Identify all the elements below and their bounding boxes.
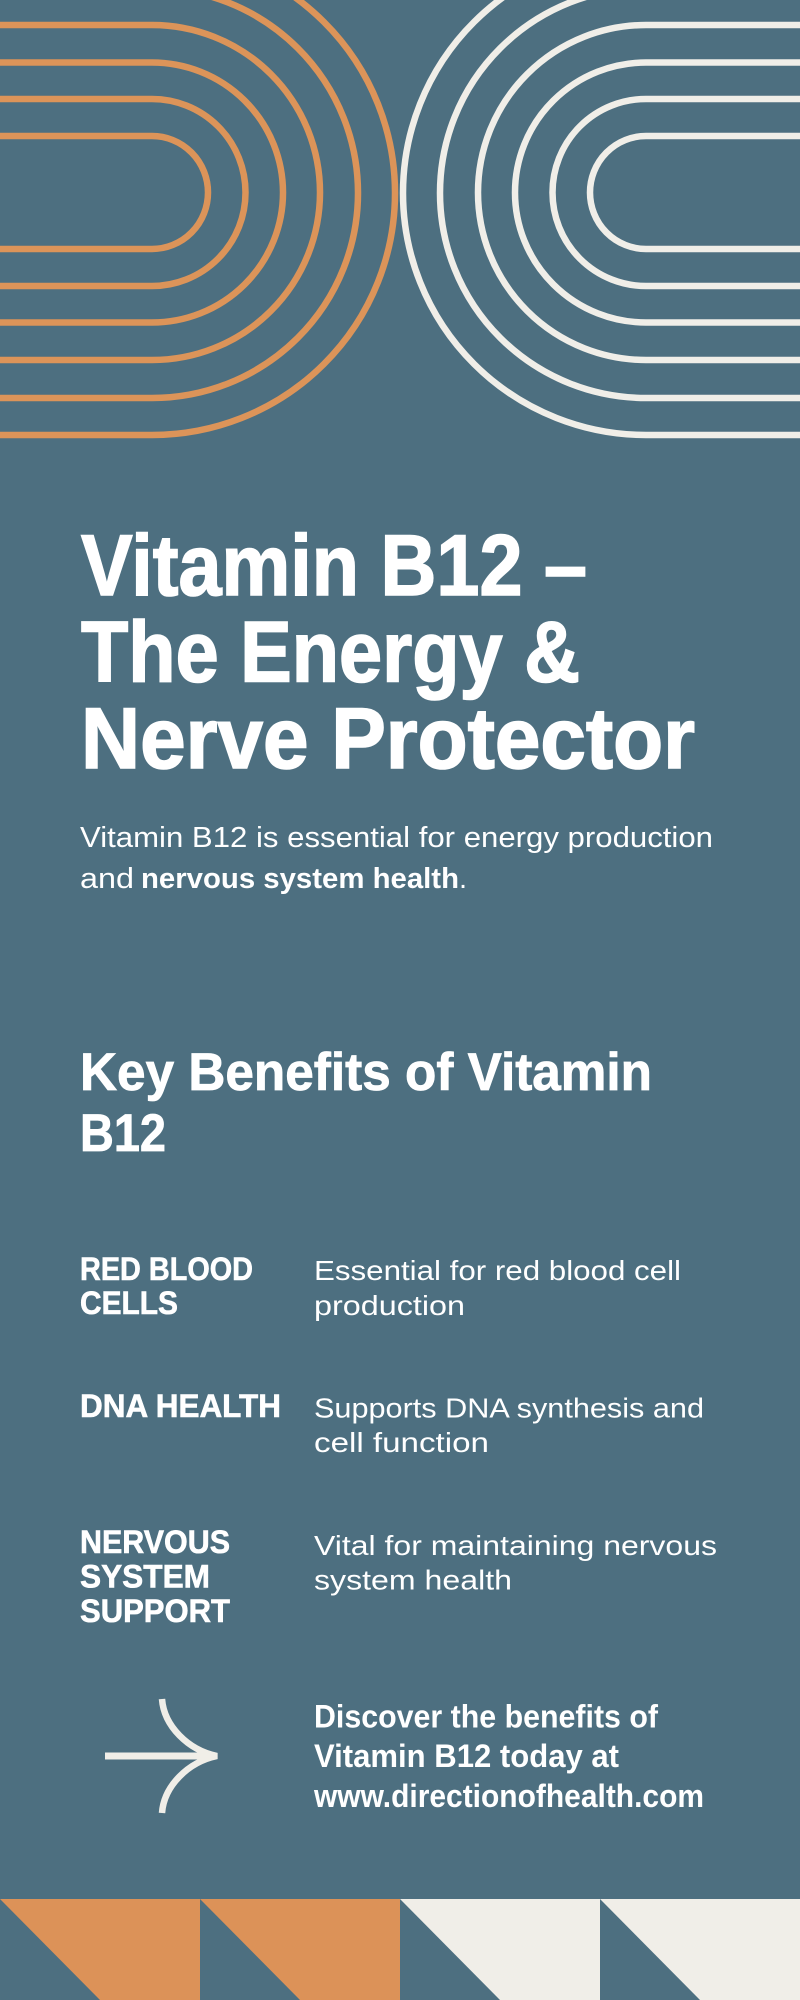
title: Nerve Protector — [81, 691, 695, 787]
description: DNA health: Supports DNA synthesis and — [314, 1392, 704, 1424]
label: red blood cells: RED BLOOD — [80, 1251, 253, 1287]
description: DNA health — [314, 1392, 704, 1458]
call to action: Discover the benefits of — [314, 1698, 658, 1734]
label: nervous system support: NERVOUS — [80, 1524, 230, 1560]
section heading: key benefits: Key Benefits of Vitamin — [80, 1043, 652, 1102]
label: nervous system support: SUPPORT — [80, 1593, 230, 1629]
decorative orange concentric arches — [0, 0, 395, 435]
title: Vitamin B12 – — [81, 518, 587, 614]
description: nervous system support — [314, 1530, 717, 1596]
label: red blood cells — [80, 1251, 253, 1321]
description: nervous system support: Vital for maintaining nervous — [314, 1530, 717, 1561]
description: red blood cells: Essential for red blood cell — [314, 1255, 681, 1286]
title — [81, 518, 695, 787]
label: nervous system support: SYSTEM — [80, 1558, 210, 1594]
label: nervous system support — [80, 1524, 230, 1629]
description: red blood cells — [314, 1255, 681, 1321]
decorative white concentric arches — [403, 0, 800, 435]
benefit: nervous system support — [80, 1524, 717, 1629]
icon: arrow — [105, 1699, 217, 1813]
description: DNA health: cell function — [314, 1427, 489, 1458]
section heading: key benefits: B12 — [80, 1104, 166, 1163]
call to action: www.directionofhealth.com — [313, 1778, 704, 1814]
label: red blood cells: CELLS — [80, 1285, 178, 1321]
footer triangle band — [0, 1899, 800, 2000]
intro paragraph: . — [459, 863, 467, 895]
description: red blood cells: production — [314, 1290, 465, 1321]
intro paragraph — [80, 822, 713, 895]
intro paragraph: and — [80, 863, 134, 895]
benefit: DNA health — [80, 1388, 704, 1458]
intro paragraph: Vitamin B12 is essential for energy production — [80, 822, 713, 854]
section heading: key benefits — [80, 1043, 652, 1163]
description: nervous system support: system health — [314, 1564, 512, 1596]
intro paragraph: nervous system health — [141, 863, 459, 895]
call to action: Vitamin B12 today at — [314, 1738, 619, 1774]
benefit: red blood cells — [80, 1251, 681, 1321]
call to action — [313, 1698, 704, 1814]
title: The Energy & — [81, 604, 580, 700]
label: DNA health: DNA HEALTH — [80, 1388, 281, 1424]
